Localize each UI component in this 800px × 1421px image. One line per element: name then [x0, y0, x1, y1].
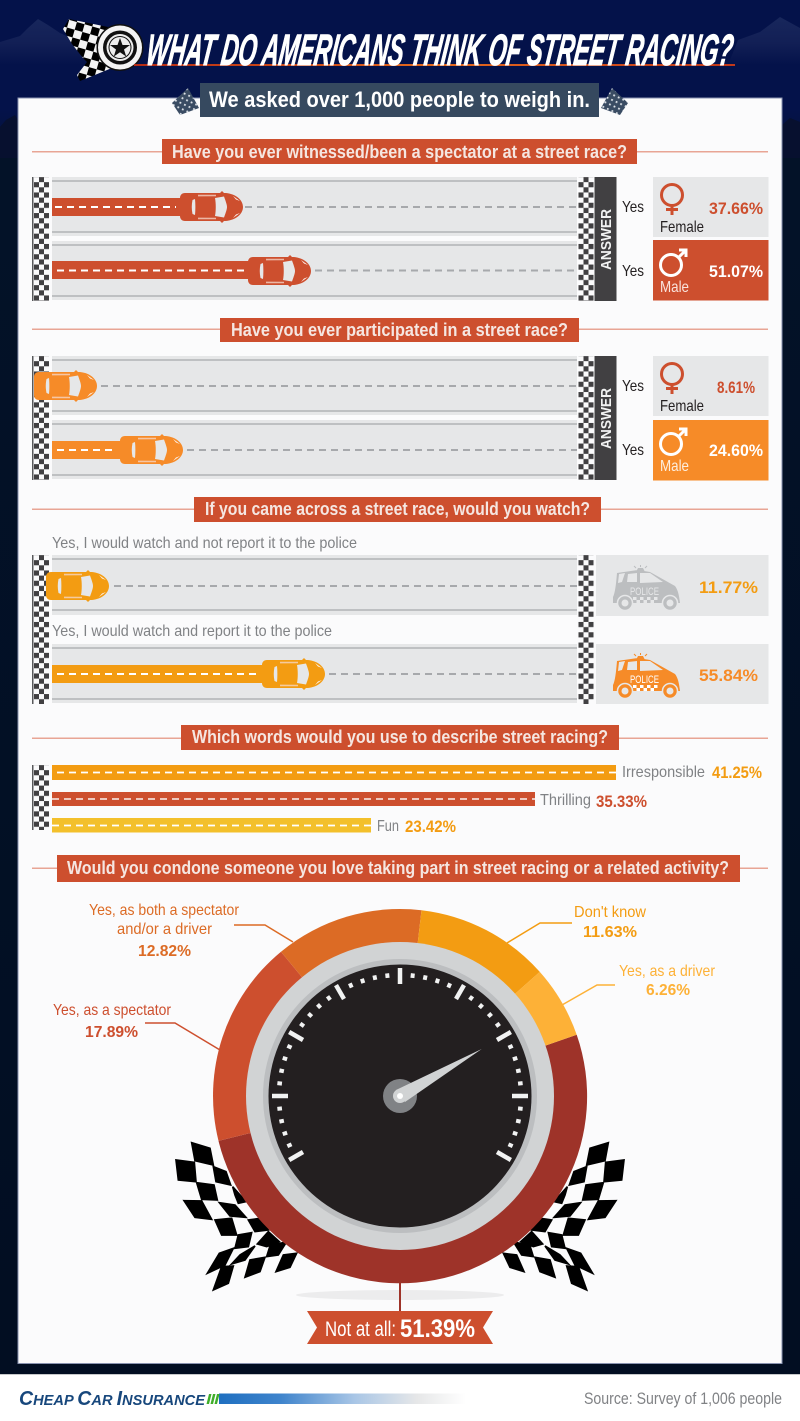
bar: female 37.66%	[52, 191, 243, 223]
section 2: participated	[32, 318, 768, 480]
callout: spectator	[53, 1002, 220, 1050]
callout: driver	[562, 963, 716, 1005]
icon: grey police car: POLICE	[630, 586, 659, 598]
callout: both: 12.82%	[138, 943, 191, 960]
male result	[653, 240, 768, 300]
title block	[63, 19, 736, 81]
major ticks	[272, 968, 528, 1160]
icon: female symbol	[662, 184, 682, 215]
icon: male symbol	[660, 429, 686, 454]
race tracks	[32, 555, 594, 704]
yes labels: Yes	[622, 378, 644, 395]
race tracks	[32, 177, 594, 301]
icon: small flag right	[601, 88, 628, 115]
bar: fun	[52, 817, 456, 836]
yes labels	[622, 199, 644, 280]
flag: right	[503, 1143, 624, 1290]
car: 11.77%	[46, 570, 109, 602]
section 3: watch	[32, 497, 768, 704]
icon: female symbol	[662, 364, 682, 394]
subtitle banner: We asked over 1,000 people to weigh in.	[209, 87, 590, 112]
logo stripes	[206, 1394, 220, 1404]
answer label: ANSWER	[598, 388, 615, 449]
icon: checkered flag	[63, 19, 112, 81]
callout ribbon: not at all: 51.39%	[400, 1315, 475, 1343]
speedometer	[246, 942, 554, 1250]
female result: 37.66%	[709, 199, 763, 218]
section 4: words	[32, 725, 768, 836]
result: no police report: 11.77%	[699, 578, 758, 597]
car: female 8.61%	[34, 370, 97, 402]
logo: CHEAP CAR INSURANCE	[19, 1388, 206, 1410]
yes labels: Yes	[622, 263, 644, 280]
female result: Female	[660, 219, 704, 236]
minor ticks	[277, 973, 523, 1146]
heading: If you came across a street race, would you watch?	[205, 499, 590, 519]
footer	[0, 1374, 800, 1421]
female result: 8.61%	[717, 378, 755, 397]
callout: spectator: 17.89%	[85, 1024, 138, 1041]
callout: both	[89, 902, 293, 960]
bar: fun: Fun	[377, 818, 399, 835]
icon: grey police car	[613, 565, 680, 610]
callout: driver: 6.26%	[646, 982, 690, 999]
heading	[32, 139, 768, 164]
bar: thrilling: Thrilling	[540, 792, 591, 809]
bar: male 24.60%	[52, 434, 183, 466]
yes labels: Yes	[622, 442, 644, 459]
donut chart	[213, 909, 587, 1283]
title underline	[134, 64, 735, 66]
callout: don't know: Don't know	[574, 904, 646, 921]
male result: 51.07%	[709, 262, 763, 281]
male result: Male	[660, 458, 689, 475]
bar: thrilling	[52, 792, 647, 811]
answer label: ANSWER	[598, 209, 615, 270]
bar: fun: 23.42%	[405, 817, 456, 836]
bar: male 51.07%	[52, 255, 311, 287]
callout ribbon: not at all: Not at all:	[325, 1318, 396, 1341]
bar: 55.84%	[52, 658, 325, 690]
icon: small flag left	[172, 88, 199, 115]
male result	[653, 420, 768, 480]
bar: irresponsible: Irresponsible	[622, 764, 705, 781]
label: not report: Yes, I would watch and not report it to the police	[52, 535, 357, 552]
needle	[383, 1049, 482, 1113]
callout: don't know: 11.63%	[583, 924, 637, 941]
answer label	[594, 177, 616, 301]
male result: 24.60%	[709, 441, 763, 460]
bar: irresponsible: 41.25%	[712, 763, 762, 782]
callout: both: Yes, as both a spectator	[89, 902, 240, 919]
heading	[32, 855, 768, 882]
icon: star roundel	[96, 24, 144, 71]
callout ribbon: not at all	[296, 1283, 504, 1344]
heading: Have you ever participated in a street race?	[231, 320, 568, 340]
female result	[653, 177, 768, 237]
result: police report: 55.84%	[699, 666, 758, 685]
bar: thrilling: 35.33%	[596, 792, 647, 811]
logo bar	[219, 1394, 466, 1404]
yes labels: Yes	[622, 199, 644, 216]
start strip	[32, 765, 49, 830]
female result	[653, 356, 768, 416]
result: police report	[596, 644, 768, 704]
icon: orange police car	[613, 653, 680, 698]
heading: Which words would you use to describe street racing?	[192, 727, 608, 747]
icon: male symbol	[660, 250, 686, 276]
icon: orange police car: POLICE	[630, 674, 659, 686]
race tracks	[32, 356, 594, 480]
callout: don't know	[507, 904, 646, 943]
heading	[32, 497, 768, 522]
callout: both: and/or a driver	[117, 921, 213, 938]
flag: left	[176, 1143, 297, 1290]
label: report: Yes, I would watch and report it to the police	[52, 623, 332, 640]
subtitle banner	[172, 83, 628, 117]
result: no police report	[596, 555, 768, 616]
answer label	[594, 356, 616, 480]
heading: Have you ever witnessed/been a spectator at a street race?	[172, 142, 627, 162]
heading: Would you condone someone you love taking part in street racing or a related activity?	[67, 858, 729, 878]
heading	[32, 318, 768, 342]
yes labels	[622, 378, 644, 459]
section 1: spectator	[32, 139, 768, 301]
bar: irresponsible	[52, 763, 762, 782]
callout: spectator: Yes, as a spectator	[53, 1002, 172, 1019]
heading	[32, 725, 768, 750]
section 5: condone	[32, 855, 768, 1344]
male result: Male	[660, 279, 689, 296]
callout: driver: Yes, as a driver	[619, 963, 716, 980]
female result: Female	[660, 398, 704, 415]
